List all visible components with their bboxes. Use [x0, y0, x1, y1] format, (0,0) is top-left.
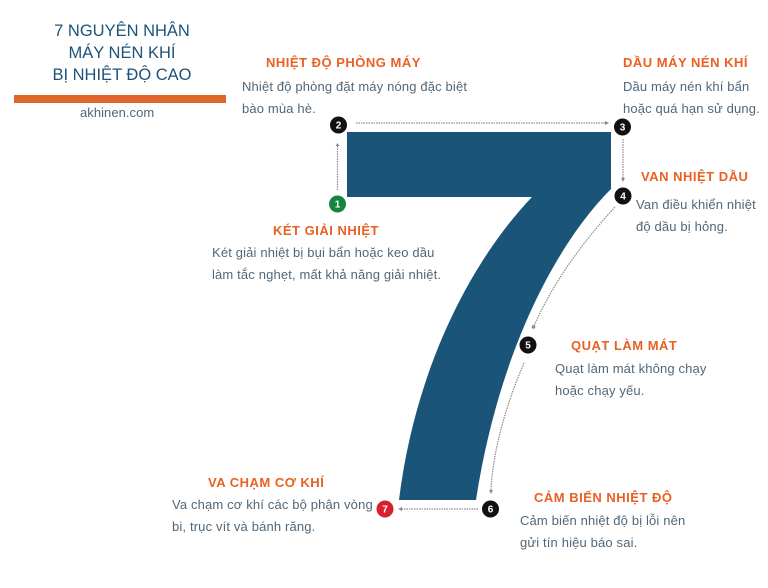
text: Quạt làm mát không chạy — [555, 361, 707, 376]
marker 5: 5 — [525, 340, 531, 352]
marker 3 — [614, 118, 631, 136]
text: Két giải nhiệt bị bụi bẩn hoặc keo dầu — [212, 245, 435, 260]
text: làm tắc nghẹt, mất khả năng giải nhiệt. — [212, 267, 441, 282]
marker 7 — [376, 500, 394, 518]
text: Van điều khiển nhiệt — [636, 197, 756, 212]
text — [520, 513, 685, 550]
text — [555, 361, 707, 398]
marker 2 — [330, 116, 347, 134]
text — [212, 245, 441, 282]
panel: cause 5 — [555, 338, 707, 398]
text — [242, 79, 467, 116]
arrow: 2 to 3 — [356, 121, 609, 125]
marker 3: 3 — [620, 122, 626, 134]
marker 6: 6 — [488, 504, 494, 516]
text: Nhiệt độ phòng đặt máy nóng đặc biệt — [242, 79, 467, 94]
heading: VAN NHIỆT DẦU — [641, 169, 748, 184]
marker 4: 4 — [620, 192, 626, 202]
big number seven — [347, 132, 611, 500]
arrow: 4 to 5 — [532, 207, 615, 329]
heading: CẢM BIẾN NHIỆT ĐỘ — [534, 490, 672, 505]
orange title bar — [14, 95, 226, 103]
heading: DẦU MÁY NÉN KHÍ — [623, 55, 748, 70]
text: bi, trục vít và bánh răng. — [172, 519, 315, 534]
panel: cause 1 — [212, 223, 441, 282]
marker 1: 1 — [335, 200, 341, 210]
title: 7 NGUYÊN NHÂN — [54, 22, 190, 40]
heading: VA CHẠM CƠ KHÍ — [208, 475, 324, 490]
text: gửi tín hiệu báo sai. — [520, 535, 637, 550]
website: akhinen.com — [80, 105, 154, 120]
arrow: 5 to 6 — [489, 363, 524, 494]
title: BỊ NHIỆT ĐỘ CAO — [52, 66, 192, 84]
heading: KÉT GIẢI NHIỆT — [273, 223, 379, 238]
text — [172, 497, 373, 534]
heading: QUẠT LÀM MÁT — [571, 338, 677, 353]
text: hoặc chạy yếu. — [555, 383, 645, 398]
panel: cause 2 — [242, 55, 467, 116]
text: Va chạm cơ khí các bộ phận vòng — [172, 497, 373, 512]
text: bào mùa hè. — [242, 101, 316, 116]
marker 4 — [614, 188, 632, 204]
title: MÁY NÉN KHÍ — [69, 44, 175, 62]
title — [52, 21, 192, 84]
text: độ dầu bị hỏng. — [636, 219, 728, 234]
marker 6 — [482, 500, 499, 518]
text: Cảm biến nhiệt độ bị lỗi nên — [520, 513, 685, 528]
marker 1 — [329, 196, 346, 212]
marker 7: 7 — [382, 504, 388, 516]
text — [623, 79, 760, 116]
arrow: 1 to 2 — [336, 143, 340, 190]
text: hoặc quá hạn sử dụng. — [623, 101, 760, 116]
text: Dầu máy nén khí bẩn — [623, 79, 749, 94]
marker 5 — [520, 336, 536, 354]
text — [636, 197, 756, 234]
arrow: 6 to 7 — [398, 507, 478, 511]
marker 2: 2 — [336, 120, 342, 132]
heading: NHIỆT ĐỘ PHÒNG MÁY — [266, 55, 421, 70]
panel: cause 7 — [172, 475, 373, 534]
panel: cause 3 — [623, 55, 760, 116]
panel: cause 6 — [520, 490, 685, 550]
arrow: 3 to 4 — [621, 139, 625, 182]
panel: cause 4 — [636, 169, 756, 234]
